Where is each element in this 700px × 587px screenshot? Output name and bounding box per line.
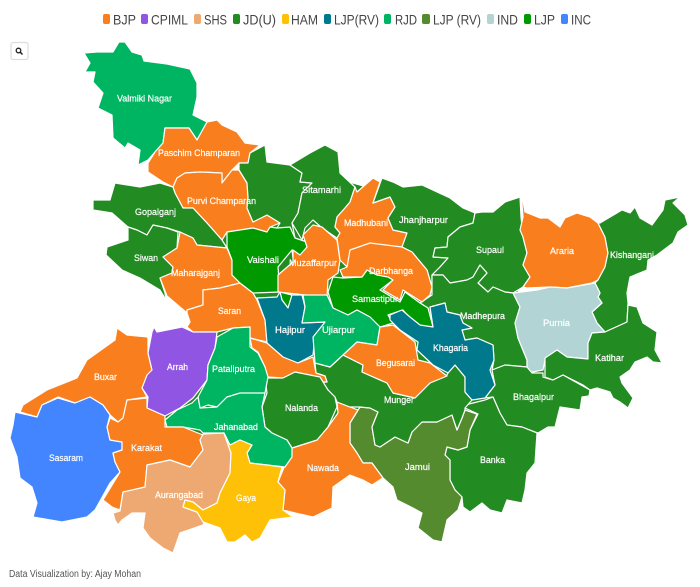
credit text: Data Visualization by: Ajay Mohan bbox=[9, 569, 141, 580]
region: Darbhanga bbox=[340, 243, 432, 302]
region: Madhubani bbox=[335, 178, 407, 267]
region: Madhepura bbox=[420, 265, 527, 370]
constituency labels: Munger bbox=[384, 395, 414, 406]
region: Gaya bbox=[183, 433, 293, 542]
constituency labels: Arrah bbox=[167, 362, 188, 373]
region: Jhanjharpur bbox=[373, 178, 475, 287]
region: Hajipur bbox=[257, 292, 325, 363]
constituency labels: Sasaram bbox=[49, 453, 83, 464]
region: Sheohar bbox=[239, 145, 312, 238]
legend: BJP bbox=[113, 12, 136, 28]
constituency labels: Jahanabad bbox=[214, 422, 258, 433]
constituency labels: Gaya bbox=[236, 493, 257, 504]
region: Katihar bbox=[545, 305, 662, 408]
constituency labels: Banka bbox=[480, 455, 506, 466]
constituency labels: Siwan bbox=[134, 253, 158, 264]
region: Vaishali bbox=[227, 227, 307, 308]
constituency labels: Begusarai bbox=[376, 358, 415, 369]
constituency labels: Araria bbox=[550, 246, 575, 257]
constituency labels: Aurangabad bbox=[155, 490, 203, 501]
constituency labels: Gopalganj bbox=[135, 207, 176, 218]
region: Gopalganj bbox=[93, 183, 227, 248]
region: Maharajganj bbox=[160, 232, 240, 313]
constituency labels: Purnia bbox=[543, 318, 571, 329]
region: Patna Sahib bbox=[250, 338, 327, 382]
region: Supaul bbox=[432, 197, 530, 293]
constituency labels: Ujiarpur bbox=[322, 325, 355, 336]
region: Khagaria bbox=[390, 303, 495, 400]
legend: LJP (RV) bbox=[433, 12, 481, 28]
constituency labels: Muzaffarpur bbox=[289, 258, 337, 269]
constituency labels: Katihar bbox=[595, 353, 624, 364]
constituency labels: Madhubani bbox=[344, 218, 388, 229]
constituency labels: Pataliputra bbox=[212, 364, 256, 375]
legend: RJD bbox=[395, 12, 417, 28]
region: Purvi Champaran bbox=[173, 170, 280, 240]
constituency labels: Khagaria bbox=[433, 343, 469, 354]
constituency labels: Karakat bbox=[131, 443, 162, 454]
region: Saran bbox=[187, 283, 267, 342]
constituency labels: Hajipur bbox=[275, 325, 305, 336]
legend: LJP bbox=[534, 12, 555, 28]
region: Siwan bbox=[106, 225, 178, 300]
legend: INC bbox=[571, 12, 591, 28]
region: Arrah bbox=[142, 327, 217, 416]
region: Bhagalpur bbox=[485, 365, 590, 433]
region: Jamui bbox=[350, 407, 477, 542]
constituency labels: Kishanganj bbox=[610, 250, 654, 261]
legend: LJP(RV) bbox=[334, 12, 379, 28]
constituency labels: Buxar bbox=[94, 372, 117, 383]
region: Karakat bbox=[103, 398, 203, 510]
zoom search button bbox=[11, 42, 28, 60]
constituency labels bbox=[49, 94, 654, 504]
region: Muzaffarpur bbox=[278, 225, 340, 297]
region: Banka bbox=[445, 397, 537, 513]
legend: HAM bbox=[291, 12, 318, 28]
region: Paschim Champaran bbox=[148, 120, 260, 187]
constituency labels: Saran bbox=[218, 306, 241, 317]
constituency labels: Nawada bbox=[307, 463, 340, 474]
constituency labels: Paschim Champaran bbox=[158, 148, 240, 159]
constituency labels: Vaishali bbox=[247, 255, 279, 266]
region: Munger bbox=[315, 355, 472, 447]
constituency labels: Jhanjharpur bbox=[399, 215, 448, 226]
constituency labels: Darbhanga bbox=[369, 266, 414, 277]
region: Ujiarpur bbox=[302, 295, 380, 367]
region: Aurangabad bbox=[113, 433, 231, 553]
constituency labels: Valmiki Nagar bbox=[117, 94, 172, 104]
region: Buxar bbox=[20, 328, 152, 422]
region: Begusarai bbox=[343, 325, 447, 398]
legend: IND bbox=[497, 12, 518, 28]
region: Kishanganj bbox=[592, 197, 688, 332]
constituency labels: Jamui bbox=[405, 462, 430, 473]
legend: JD(U) bbox=[243, 12, 276, 28]
legend bbox=[103, 12, 591, 28]
region: Araria bbox=[520, 190, 608, 288]
legend: SHS bbox=[204, 12, 227, 28]
region: Sitamarhi bbox=[290, 145, 355, 240]
region: Nalanda bbox=[262, 372, 337, 448]
legend: CPIML bbox=[151, 12, 188, 28]
constituency labels: Maharajganj bbox=[171, 268, 220, 279]
constituency labels: Bhagalpur bbox=[513, 392, 554, 403]
region: Pataliputra bbox=[198, 327, 268, 408]
constituency labels: Sitamarhi bbox=[302, 185, 341, 196]
region: Purnia bbox=[513, 283, 605, 373]
constituency labels: Madhepura bbox=[460, 311, 506, 322]
region: Sasaram bbox=[10, 397, 122, 522]
region: Nawada bbox=[278, 402, 383, 517]
constituency labels: Supaul bbox=[476, 245, 504, 256]
region: Jahanabad bbox=[165, 393, 292, 467]
constituency labels: Purvi Champaran bbox=[187, 196, 256, 207]
constituency labels: Nalanda bbox=[285, 403, 319, 414]
constituency labels: Samastipur bbox=[352, 294, 398, 305]
region: Valmiki Nagar bbox=[84, 42, 207, 165]
region: Samastipur bbox=[328, 270, 433, 327]
